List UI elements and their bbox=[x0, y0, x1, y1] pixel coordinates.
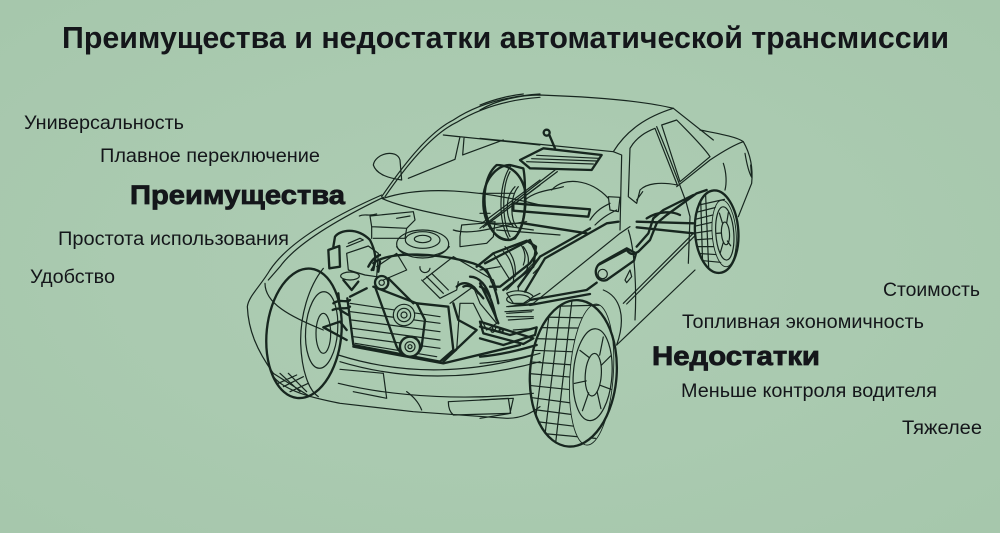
intake manifold bbox=[373, 253, 498, 362]
car front half and engine bbox=[247, 94, 540, 418]
front right wheel with tread bbox=[528, 299, 618, 448]
rear right wheel bbox=[690, 189, 741, 275]
panel: disadvantages bbox=[652, 280, 982, 439]
windshield and hood bbox=[247, 94, 540, 418]
coil and wiring bbox=[328, 231, 380, 315]
rear wheel partial bbox=[485, 165, 525, 240]
exhaust system bbox=[530, 190, 707, 305]
fuel tank and frame bbox=[490, 181, 620, 235]
front suspension bbox=[323, 257, 540, 363]
driveshaft bbox=[518, 222, 693, 292]
radiator and belts bbox=[347, 276, 453, 362]
heading: disadvantages: Недостатки bbox=[652, 341, 820, 371]
transmission tail bbox=[480, 240, 537, 357]
rear left wheel bbox=[483, 165, 525, 240]
text: smooth shifting: Плавное переключение bbox=[100, 146, 320, 167]
title: Преимущества и недостатки автоматической трансмиссии bbox=[62, 20, 949, 55]
gear lever and console bbox=[520, 130, 602, 170]
muffler bbox=[596, 248, 636, 281]
text: less driver control: Меньше контроля водителя bbox=[681, 381, 937, 402]
text: heavier: Тяжелее bbox=[902, 418, 982, 439]
panel: advantages bbox=[24, 113, 346, 288]
text: versatility: Универсальность bbox=[24, 113, 184, 134]
text: ease of use: Простота использования bbox=[58, 229, 289, 250]
text: convenience: Удобство bbox=[30, 267, 115, 288]
air filter bbox=[397, 230, 449, 258]
front left wheel bbox=[260, 265, 348, 402]
battery bbox=[359, 212, 415, 238]
car rear half and drivetrain bbox=[480, 94, 752, 459]
shift rod bbox=[480, 170, 557, 228]
heading: advantages: Преимущества bbox=[130, 180, 346, 210]
text: cost: Стоимость bbox=[883, 280, 980, 301]
roof and body bbox=[480, 94, 752, 345]
illustration: car with transmission bbox=[247, 94, 752, 459]
text: fuel economy: Топливная экономичность bbox=[682, 312, 924, 333]
transmission housing bbox=[453, 180, 540, 290]
